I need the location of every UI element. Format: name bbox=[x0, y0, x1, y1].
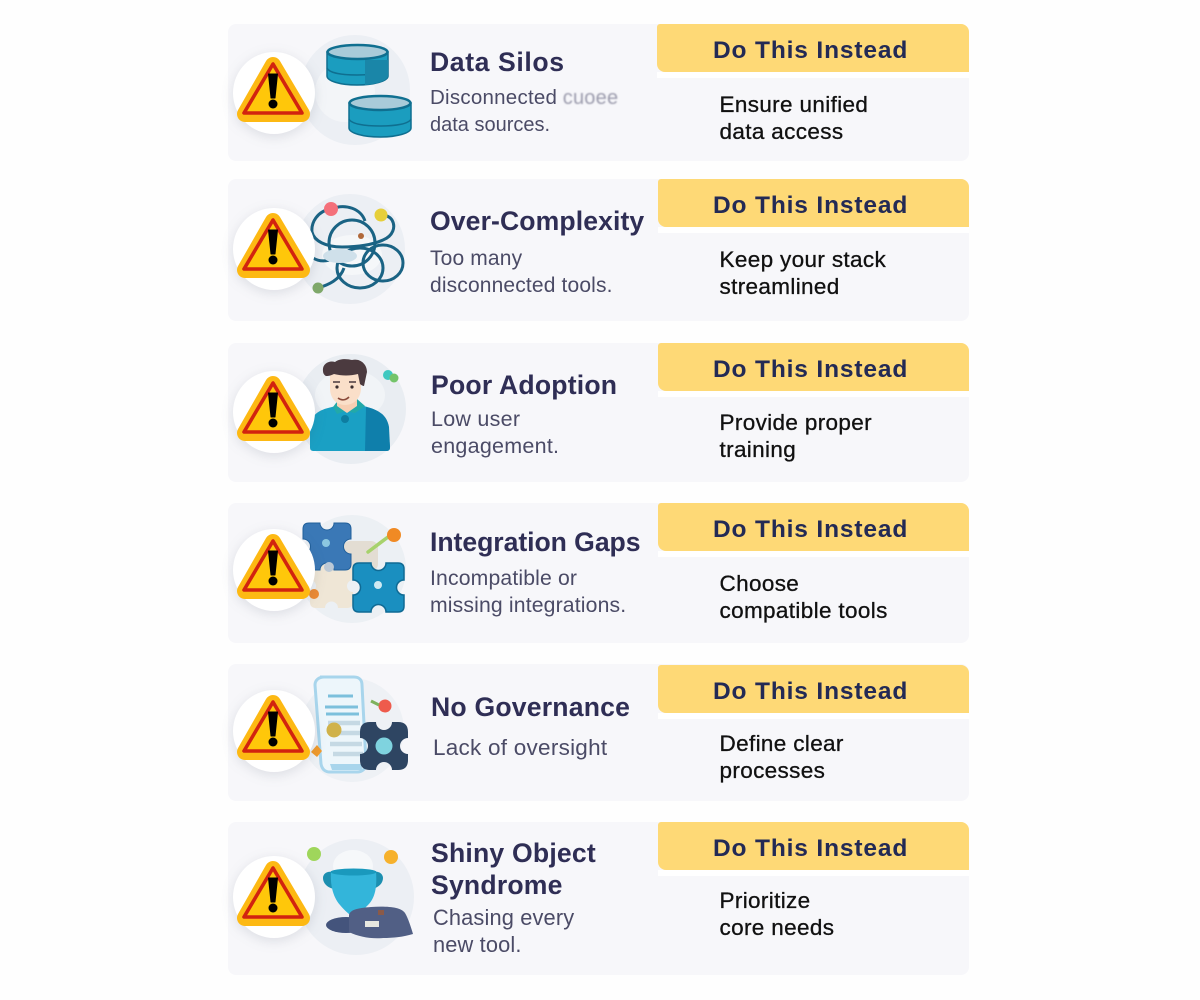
do this instead header bbox=[658, 503, 969, 551]
recommendation: Provide proper bbox=[720, 410, 872, 435]
do this instead header: Do This Instead bbox=[713, 678, 908, 705]
heading: shiny object syndrome: Syndrome bbox=[431, 870, 563, 900]
recommendation bbox=[720, 571, 888, 623]
recommendation: Prioritize bbox=[720, 888, 811, 913]
recommendation: Choose bbox=[720, 571, 799, 596]
recommendation: compatible tools bbox=[720, 598, 888, 623]
do this instead header: Do This Instead bbox=[713, 37, 908, 64]
problem description: missing integrations. bbox=[430, 594, 626, 616]
recommendation: processes bbox=[720, 758, 825, 783]
illustration: puzzle pieces bbox=[302, 515, 406, 623]
panel: no governance bbox=[228, 664, 969, 801]
warning icon bbox=[230, 861, 318, 944]
header gap strip bbox=[658, 713, 969, 719]
header gap strip bbox=[658, 551, 969, 557]
do this instead header bbox=[658, 665, 969, 713]
recommendation: Ensure unified bbox=[720, 92, 868, 117]
warning icon bbox=[230, 376, 318, 459]
problem description: Chasing every bbox=[433, 905, 574, 930]
recommendation bbox=[720, 247, 886, 299]
illustration: user avatar bbox=[303, 354, 406, 464]
recommendation bbox=[720, 888, 834, 940]
panel: integration gaps bbox=[228, 503, 969, 643]
problem description bbox=[430, 247, 613, 296]
panel: poor adoption bbox=[228, 343, 969, 482]
header gap strip bbox=[657, 72, 969, 78]
problem description bbox=[433, 905, 574, 956]
problem description: Disconnected cuoee bbox=[430, 86, 618, 109]
recommendation: data access bbox=[720, 119, 843, 144]
recommendation: streamlined bbox=[720, 274, 840, 299]
warning icon bbox=[230, 534, 318, 617]
recommendation bbox=[720, 92, 868, 144]
problem description: Low user bbox=[431, 407, 520, 431]
heading: shiny object syndrome: Shiny Object bbox=[431, 838, 596, 868]
warning icon bbox=[230, 695, 318, 778]
heading: no governance: No Governance bbox=[431, 692, 630, 722]
recommendation: Keep your stack bbox=[720, 247, 886, 272]
heading: poor adoption: Poor Adoption bbox=[431, 370, 617, 400]
problem description bbox=[430, 86, 618, 136]
header gap strip bbox=[658, 227, 969, 233]
do this instead header bbox=[657, 24, 969, 72]
illustration: database cylinders bbox=[306, 35, 412, 145]
panel: shiny object syndrome bbox=[228, 822, 969, 975]
do this instead header bbox=[658, 179, 969, 227]
warning icon bbox=[230, 213, 318, 296]
panel: over-complexity bbox=[228, 179, 969, 321]
problem description: new tool. bbox=[433, 932, 522, 956]
panel: data silos bbox=[228, 24, 969, 161]
heading: over-complexity: Over-Complexity bbox=[430, 206, 644, 236]
heading: shiny object syndrome bbox=[431, 838, 596, 900]
recommendation: training bbox=[720, 437, 796, 462]
problem description: Too many bbox=[430, 247, 522, 270]
problem description bbox=[430, 567, 626, 616]
recommendation: Define clear bbox=[720, 731, 844, 756]
illustration: document and gear bbox=[306, 676, 408, 782]
recommendation bbox=[720, 731, 844, 783]
warning icon bbox=[230, 57, 318, 140]
problem description: Lack of oversight bbox=[433, 735, 607, 760]
problem description bbox=[431, 407, 559, 458]
problem description: disconnected tools. bbox=[430, 274, 613, 296]
do this instead header bbox=[658, 822, 969, 870]
heading: data silos: Data Silos bbox=[430, 47, 565, 77]
illustration: tangled network bbox=[304, 194, 405, 304]
heading: integration gaps: Integration Gaps bbox=[430, 527, 640, 557]
header gap strip bbox=[658, 870, 969, 876]
do this instead header bbox=[658, 343, 969, 391]
problem description: engagement. bbox=[431, 434, 559, 458]
header gap strip bbox=[658, 391, 969, 397]
problem description: Incompatible or bbox=[430, 567, 577, 590]
recommendation bbox=[720, 410, 872, 462]
do this instead header: Do This Instead bbox=[713, 356, 908, 383]
do this instead header: Do This Instead bbox=[713, 835, 908, 862]
do this instead header: Do This Instead bbox=[713, 516, 908, 543]
do this instead header: Do This Instead bbox=[713, 192, 908, 219]
recommendation: core needs bbox=[720, 915, 834, 940]
problem description: data sources. bbox=[430, 114, 550, 136]
illustration: trophy on base bbox=[305, 839, 414, 955]
